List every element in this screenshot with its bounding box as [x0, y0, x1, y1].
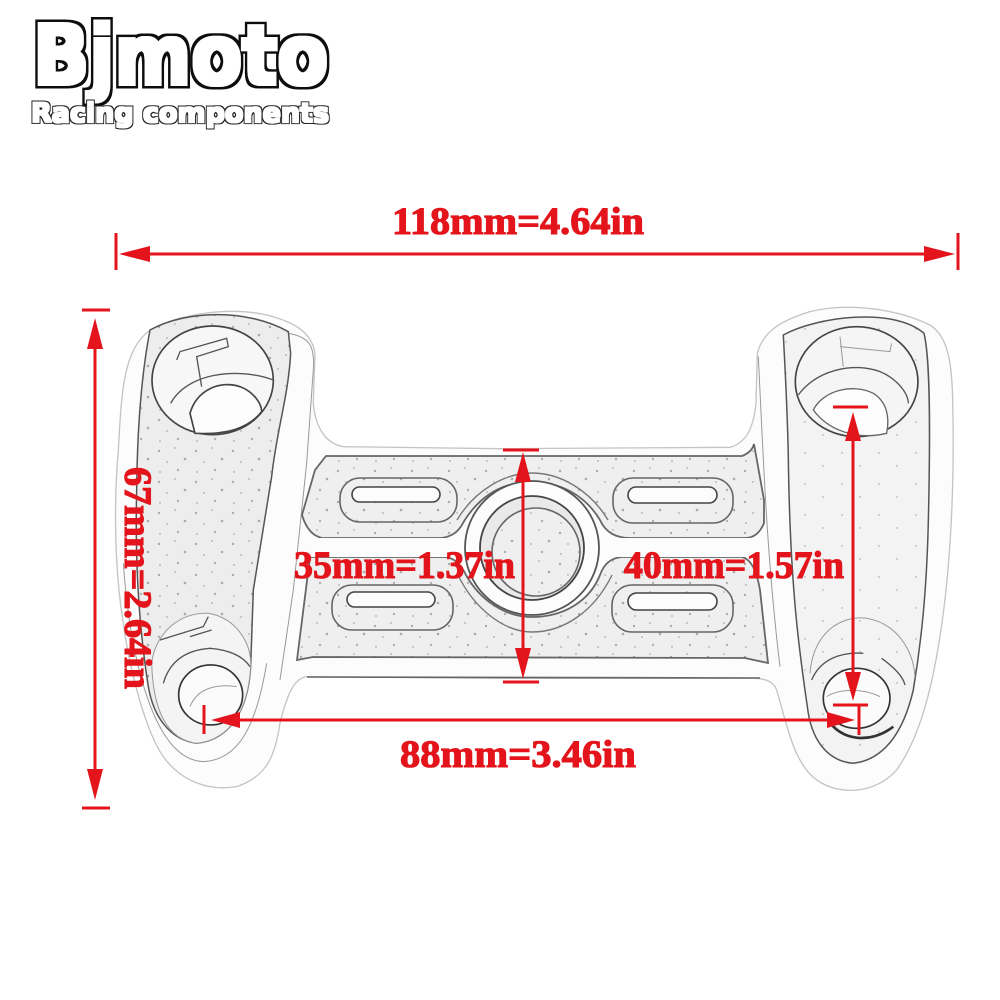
dimension: overall height: [82, 310, 159, 808]
left lug: [116, 311, 500, 788]
dimension: bolt spacing vertical: 40mm=1.57in: [624, 544, 844, 587]
center ring: [465, 481, 599, 615]
dimension: bolt spacing horizontal: 88mm=3.46in: [400, 733, 636, 776]
dimension: bolt spacing horizontal: [204, 705, 859, 776]
upper bolt hole right: [795, 327, 918, 437]
dimension: overall height: 67mm=2.64in: [116, 467, 159, 689]
logo: Bjmoto Racing components: Racing components: [31, 98, 329, 129]
bottom edge line of bridge: [307, 677, 760, 678]
dimension: center height: [294, 450, 539, 682]
upper bolt hole left: [152, 326, 273, 435]
part drawing: riser clamp: [116, 307, 953, 790]
dimension: bolt spacing vertical: [624, 407, 868, 705]
slots: [332, 478, 733, 632]
upper bridge panel: [302, 444, 764, 538]
lower bolt hole left: [152, 613, 251, 743]
dimension: overall width: 118mm=4.64in: [392, 200, 644, 243]
center strip: [304, 538, 762, 557]
logo: Bjmoto Racing components: Bjmoto: [33, 9, 328, 104]
ring outer arcs: [457, 473, 612, 632]
dimension: center height: 35mm=1.37in: [294, 544, 515, 587]
dimension: overall width: [116, 200, 958, 270]
lower bridge panel: [297, 557, 768, 663]
right lug: [500, 307, 953, 790]
lower bolt hole right: [810, 618, 915, 677]
